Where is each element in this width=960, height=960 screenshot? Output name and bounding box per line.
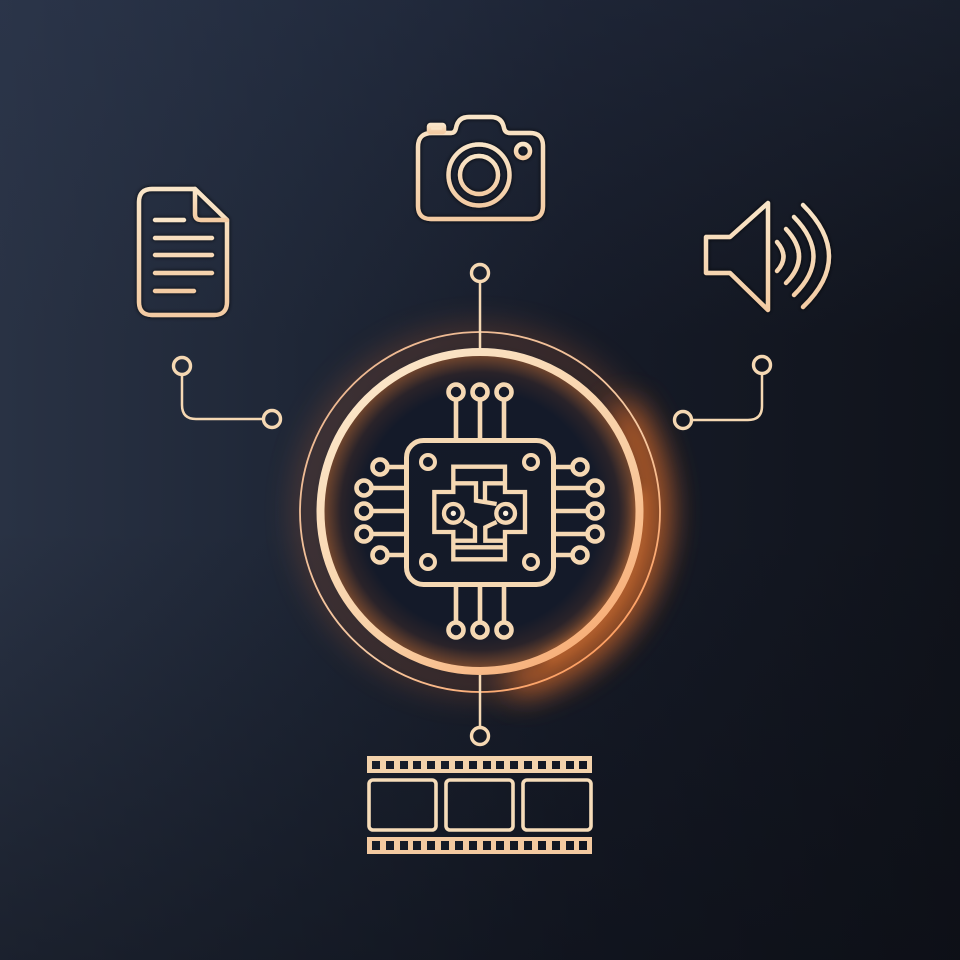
bottom perforated strip: [367, 837, 592, 854]
hot edge: [545, 490, 641, 660]
icon: film strip: [367, 756, 592, 854]
icon: camera: [418, 117, 543, 219]
connector: camera: [472, 264, 488, 348]
icon: processor chip: [356, 384, 602, 638]
thin outer ring: [300, 332, 660, 692]
flash: [516, 144, 530, 158]
main ring: [320, 352, 640, 671]
sound waves: [777, 205, 829, 307]
central glowing ring: [300, 332, 660, 692]
connector: document: [174, 358, 280, 428]
chip body: [406, 440, 554, 584]
icon: speaker: [706, 203, 829, 310]
ring interior: [322, 353, 638, 669]
film frames: [369, 780, 591, 830]
soft halo: [308, 339, 652, 683]
corner holes: [421, 455, 538, 569]
page fold: [195, 189, 227, 220]
chip pins: [356, 384, 602, 638]
shutter button: [429, 125, 444, 132]
lens: [448, 144, 510, 206]
top perforated strip: [367, 756, 592, 773]
icon: document: [139, 189, 227, 315]
text lines: [155, 220, 212, 291]
central cross circuit: [434, 467, 525, 559]
connector: film: [472, 675, 488, 744]
glow arc: [510, 410, 651, 680]
connector: audio: [674, 356, 770, 428]
